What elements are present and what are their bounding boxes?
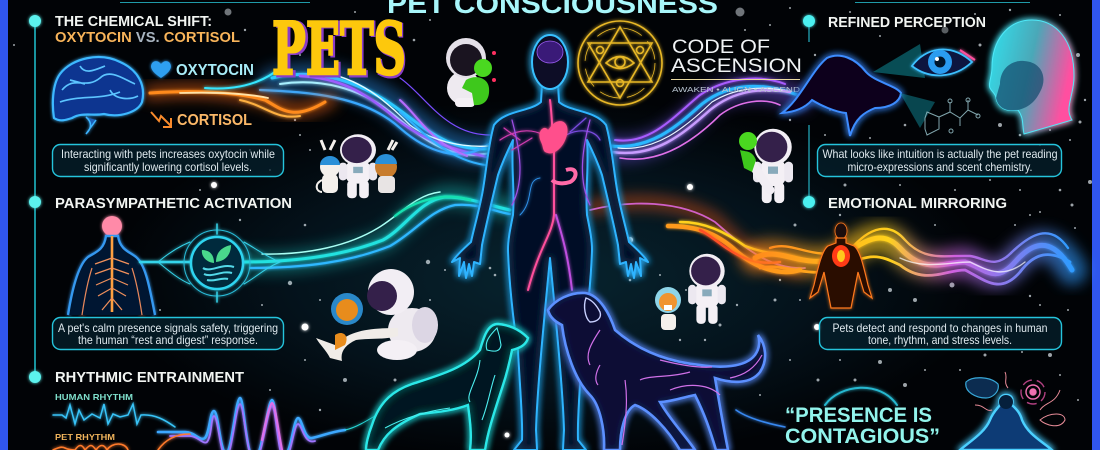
heading: emotional mirroring: EMOTIONAL MIRRORING	[828, 196, 1007, 212]
connector waves	[140, 224, 280, 302]
teal wave: middle left	[244, 192, 510, 268]
callout: oxytocin	[52, 144, 284, 176]
left timeline	[29, 15, 41, 383]
heading: rhythmic entrainment: RHYTHMIC ENTRAINMENT	[55, 370, 244, 386]
circulatory system	[500, 100, 600, 290]
glowing human head	[989, 20, 1074, 134]
emotional wave	[755, 229, 1072, 284]
brain in head	[537, 41, 563, 63]
heading: refined perception: REFINED PERCEPTION	[828, 15, 986, 31]
callout: oxytocin: Interacting with pets increases oxytocin while	[61, 147, 275, 161]
callout: calm presence	[52, 318, 284, 350]
heading: parasympathetic: PARASYMPATHETIC ACTIVATION	[55, 196, 292, 212]
callout: intuition: What looks like intuition is actually the pet reading	[822, 147, 1058, 161]
icon: calm circle	[191, 237, 243, 289]
callout: intuition: micro-expressions and scent chemistry.	[848, 160, 1032, 174]
right timeline	[803, 15, 815, 208]
callout: mirroring: Pets detect and respond to changes in human	[832, 321, 1048, 335]
logo emblem	[578, 21, 662, 105]
quote: “PRESENCE IS	[785, 404, 932, 427]
label: human rhythm: HUMAN RHYTHM	[55, 392, 133, 402]
heart	[539, 121, 568, 153]
callout: calm presence: A pet's calm presence signals safety, triggering	[58, 321, 278, 335]
callout: mirroring	[820, 318, 1062, 350]
logo: code of ascension	[578, 21, 802, 105]
callout: oxytocin: significantly lowering cortisol levels.	[84, 160, 252, 174]
nervous system figure	[68, 216, 155, 315]
cartoon: astronaut with cat and dog	[317, 134, 397, 198]
face shadow	[996, 61, 1043, 110]
icon: eye	[912, 50, 975, 75]
orange wave: middle right	[590, 202, 805, 272]
pets sticker: PETS	[272, 6, 406, 91]
quote: CONTAGIOUS”	[785, 425, 940, 448]
heading: chemical shift	[55, 14, 240, 46]
quote	[785, 404, 940, 448]
logo wordmark: CODE OF	[672, 37, 770, 58]
spiral galaxy	[1021, 380, 1045, 404]
oxytocin label: OXYTOCIN	[176, 62, 254, 79]
heading: chemical shift: THE CHEMICAL SHIFT:	[55, 14, 212, 30]
icon: molecule	[925, 98, 980, 135]
cartoon: astronaut hugging alien	[446, 38, 496, 107]
heading: chemical shift: OXYTOCIN VS. CORTISOL	[55, 30, 240, 46]
small brain	[966, 378, 998, 398]
callout: calm presence: the human “rest and digest” response.	[78, 333, 258, 347]
glowing dog: violet	[548, 293, 785, 450]
cartoon: astronaut with shiba	[655, 254, 726, 330]
callout: intuition	[818, 144, 1062, 176]
orange cortisol flare	[150, 72, 330, 117]
label: pet rhythm: PET RHYTHM	[55, 432, 115, 442]
glowing dog: cyan	[366, 324, 528, 450]
cartoon: astronaut with orange pup	[316, 269, 438, 361]
logo wordmark: AWAKEN • ALIGN • ASCEND	[672, 85, 801, 94]
stomach	[552, 169, 576, 183]
logo wordmark: ASCENSION	[671, 56, 802, 77]
scent and sight cones	[873, 44, 935, 128]
mirroring figure	[810, 223, 872, 308]
thought threads	[975, 372, 1065, 426]
top rule	[120, 2, 1030, 4]
callout: mirroring: tone, rhythm, and stress levels.	[868, 333, 1012, 347]
cortisol label: CORTISOL	[177, 112, 252, 129]
pet rhythm trace	[53, 444, 128, 450]
logo wordmark	[671, 37, 802, 94]
cartoon: astronaut with alien right	[739, 129, 793, 203]
quote arc	[825, 388, 897, 405]
sparkle stars	[211, 182, 820, 438]
pets sticker	[272, 6, 407, 94]
human rhythm trace	[53, 404, 175, 427]
meditating figure with brain and galaxy	[960, 372, 1065, 450]
main human body	[452, 35, 648, 450]
energy waves: upper left	[260, 72, 497, 165]
icon: brain	[53, 57, 143, 134]
entrained wave	[158, 398, 385, 450]
dog head profile	[782, 56, 901, 136]
energy waves: upper right	[610, 79, 800, 159]
pets sticker: PETS	[275, 8, 407, 94]
